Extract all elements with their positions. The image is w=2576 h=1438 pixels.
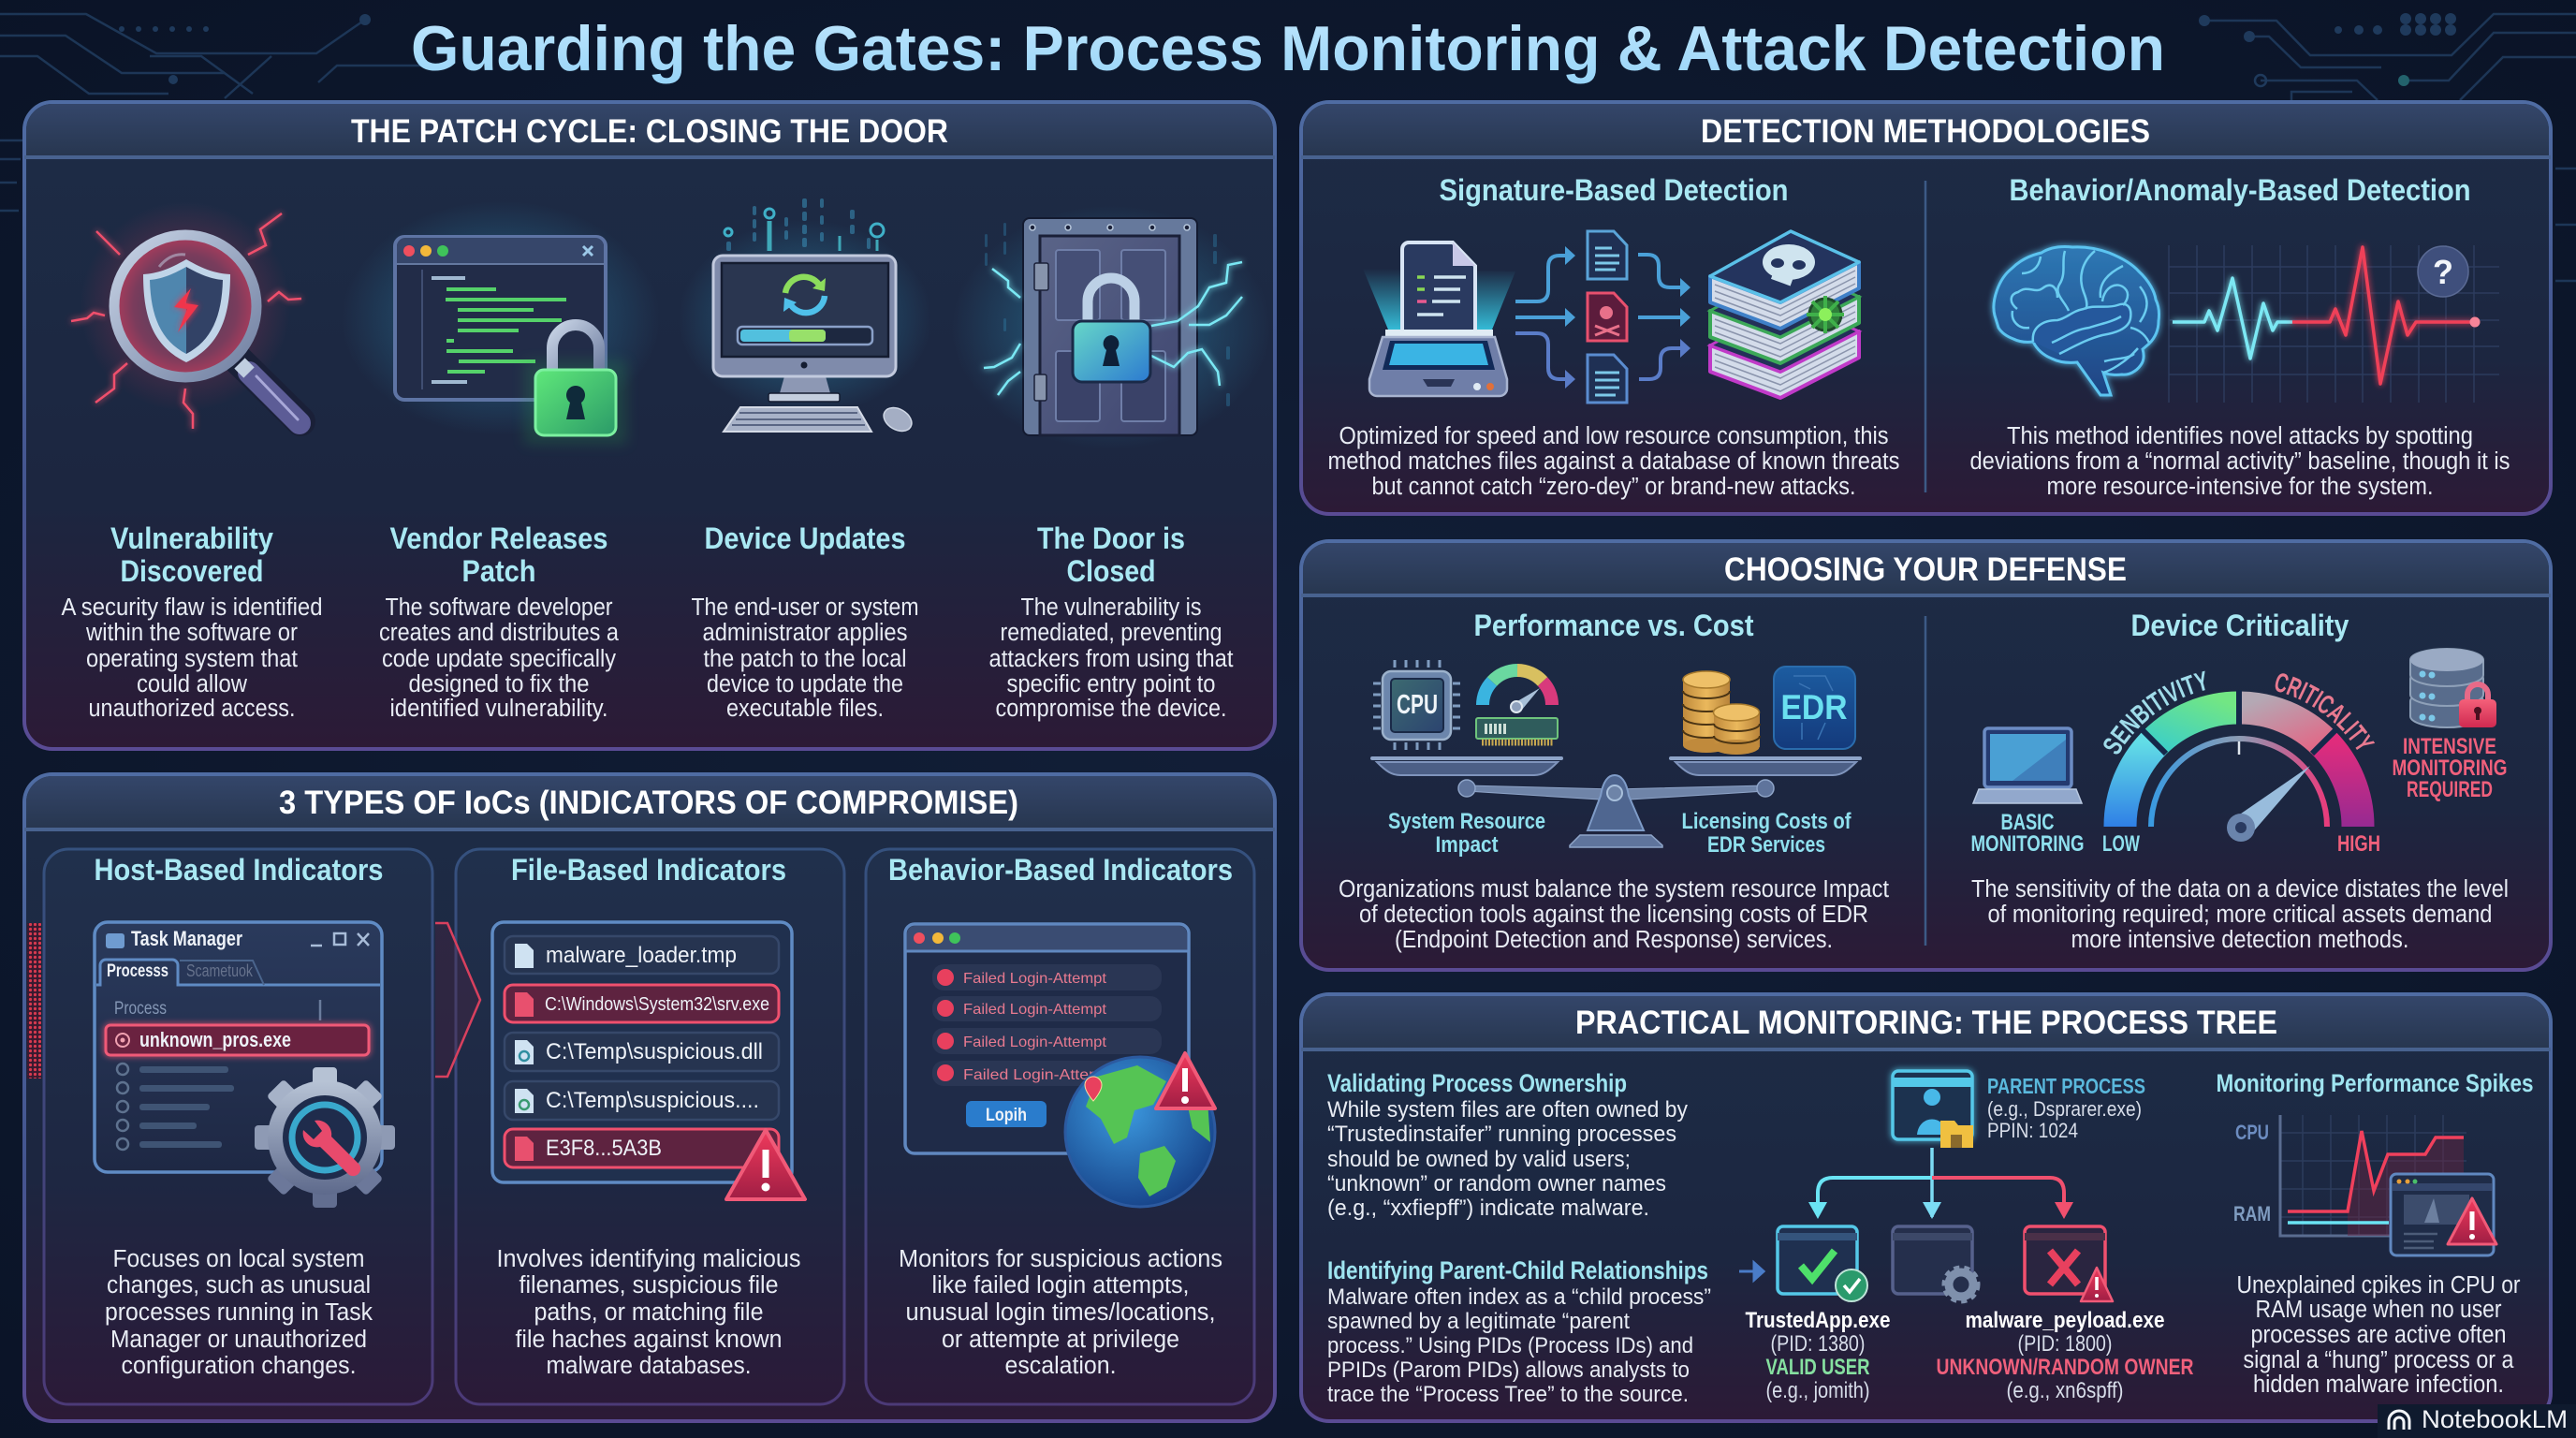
label: system resource impact: Impact [1436, 832, 1499, 858]
label: intensive monitoring required: REQUIRED [2407, 777, 2493, 802]
icon: login window with globe: Failed Login-Atter [963, 1067, 1095, 1083]
icon: login window with globe: Failed Login-Attempt [963, 1034, 1107, 1050]
icon: suspicious file list: C:\Windows\System32\srv.exe [545, 994, 769, 1015]
panel: detection methodologies [1301, 102, 2551, 514]
text: file-based description: malware databases. [547, 1353, 751, 1379]
heading: signature-based: Signature-Based Detection [1440, 173, 1788, 207]
heading: performance vs cost: Performance vs. Cost [1473, 609, 1754, 642]
label: basic monitoring [1971, 810, 2084, 857]
text: validating process ownership: “unknown” or random owner names [1327, 1171, 1666, 1196]
icon: balance scale with CPU, gauge, coins and EDR: EDR [1780, 688, 1848, 726]
column: vendor releases patch: The software developer [386, 594, 613, 621]
text: performance description: of detection tools against the licensing costs of EDR [1359, 902, 1868, 928]
icon: valid child window [1778, 1226, 1867, 1301]
text: device criticality description: more intensive detection methods. [2071, 927, 2409, 953]
chart: sensitivity gauge: HIGH [2337, 831, 2380, 857]
chart: CPU and RAM spikes: CPU [2235, 1121, 2269, 1144]
text: identifying parent-child relationships: PPIDs (Parom PIDs) allows analysts to [1327, 1357, 1690, 1383]
chart: sensitivity gauge [2102, 670, 2380, 857]
title: Guarding the Gates: Process Monitoring & Attack Detection [411, 13, 2165, 84]
text: identifying parent-child relationships: Identifying Parent-Child Relationships [1327, 1256, 1708, 1284]
text: host-based description: configuration changes. [122, 1353, 356, 1379]
text: file-based description: filenames, suspicious file [519, 1272, 779, 1299]
text: host-based description [105, 1246, 373, 1379]
chart: CPU and RAM spikes [2233, 1115, 2496, 1255]
icon: malware child window [2025, 1226, 2113, 1301]
column: vendor releases patch: Vendor Releases [389, 521, 608, 555]
text: validating process ownership: Validating Process Ownership [1327, 1069, 1627, 1097]
column: device updates: device to update the [707, 671, 903, 697]
text: behavior-based description [899, 1246, 1222, 1379]
icon: login window with globe: Lopih [986, 1106, 1027, 1125]
label: trusted app: (PID: 1380) [1771, 1331, 1865, 1357]
text: file-based description: paths, or matching file [534, 1299, 764, 1326]
column: the door is closed [988, 521, 1234, 722]
column: the door is closed: Closed [1067, 554, 1155, 588]
icon: locked door with lightning [952, 206, 1270, 449]
icon: monitor updating [679, 198, 931, 436]
label: licensing costs [1681, 809, 1852, 858]
label: licensing costs: EDR Services [1707, 832, 1825, 858]
text: identifying parent-child relationships: process.” Using PIDs (Process IDs) and [1327, 1333, 1693, 1358]
panel: choosing your defense [1299, 539, 2553, 972]
icon: task manager window with gear: Task Manager [131, 927, 242, 950]
text: device criticality description: The sensitivity of the data on a device distates the level [1971, 876, 2509, 902]
heading: IoCs: 3 TYPES OF IoCs (INDICATORS OF COMPROMISE) [279, 785, 1018, 821]
icon: task manager window with gear: Process [114, 999, 167, 1019]
text: file-based description [496, 1246, 801, 1379]
column: vulnerability discovered: could allow [137, 671, 248, 697]
text: spikes description: hidden malware infection. [2253, 1372, 2504, 1398]
heading: file-based: File-Based Indicators [511, 853, 786, 887]
text: validating process ownership: should be owned by valid users; [1327, 1147, 1631, 1172]
label: trusted app: VALID USER [1765, 1355, 1870, 1380]
text: performance description: (Endpoint Detection and Response) services. [1395, 927, 1833, 953]
column: vendor releases patch: designed to fix the [408, 671, 590, 697]
label: parent process: PARENT PROCESS [1987, 1074, 2145, 1098]
column: the door is closed: The vulnerability is [1020, 594, 1202, 621]
text: host-based description: Manager or unauthorized [110, 1327, 367, 1353]
label: intensive monitoring required [2393, 734, 2507, 802]
text: identifying parent-child relationships: trace the “Process Tree” to the source. [1327, 1382, 1689, 1407]
text: spikes description: RAM usage when no user [2256, 1297, 2502, 1323]
column: the door is closed: specific entry point to [1007, 671, 1215, 697]
column: vulnerability discovered [62, 521, 322, 722]
icon: login window with globe: Failed Login-Attempt [963, 1002, 1107, 1018]
icon: task manager window with gear: Processs [107, 961, 168, 981]
column: vulnerability discovered: Discovered [120, 554, 264, 588]
text: file-based description: Involves identifying malicious [496, 1246, 801, 1272]
text: behavior-based description: escalation. [1005, 1353, 1116, 1379]
label: malware payload: (PID: 1800) [2018, 1331, 2112, 1357]
icon: login window with globe [905, 924, 1215, 1207]
text: validating process ownership: While system files are often owned by [1327, 1097, 1689, 1123]
text: validating process ownership: (e.g., “xxfiepff”) indicate malware. [1327, 1196, 1649, 1221]
card: host-based indicators [27, 849, 432, 1404]
label: trusted app [1745, 1308, 1891, 1403]
label: basic monitoring: MONITORING [1971, 831, 2084, 857]
text: behavior-based description [1969, 423, 2510, 500]
column: vulnerability discovered: within the software or [85, 620, 298, 646]
label: trusted app: TrustedApp.exe [1745, 1308, 1891, 1333]
card: behavior-based indicators [866, 849, 1254, 1404]
icon: suspicious file list: malware_loader.tmp [546, 943, 737, 968]
text: validating process ownership [1327, 1069, 1689, 1221]
icon: suspicious file list: E3F8...5A3B [546, 1136, 662, 1161]
watermark: NotebookLM: NotebookLM [2422, 1405, 2568, 1433]
label: malware payload: UNKNOWN/RANDOM OWNER [1936, 1355, 2194, 1380]
icon: task manager window with gear [27, 922, 395, 1208]
column: device updates: the patch to the local [704, 646, 906, 672]
text: signature-based description: method matches files against a database of known threats [1327, 448, 1900, 475]
text: signature-based description [1327, 423, 1900, 500]
column: device updates: The end-user or system [691, 594, 919, 621]
icon: brain and anomaly ECG: ? [2433, 253, 2453, 291]
column: the door is closed: The Door is [1037, 521, 1185, 555]
label: intensive monitoring required: INTENSIVE [2403, 734, 2496, 759]
text: performance description [1339, 876, 1889, 953]
column: vulnerability discovered: operating system that [86, 646, 298, 672]
heading: choosing your defense: CHOOSING YOUR DEFENSE [1724, 551, 2127, 588]
chart: sensitivity gauge: CRITICALITY [2275, 673, 2376, 750]
chart: CPU and RAM spikes: RAM [2233, 1202, 2271, 1225]
icon: balance scale with CPU, gauge, coins and EDR [1370, 660, 1862, 847]
label: system resource impact: System Resource [1388, 809, 1545, 834]
label: parent process: PPIN: 1024 [1987, 1119, 2078, 1142]
heading: patch cycle: THE PATCH CYCLE: CLOSING THE DOOR [351, 113, 948, 150]
heading: practical monitoring: PRACTICAL MONITORING: THE PROCESS TREE [1575, 1005, 2277, 1041]
icon: suspicious file list: C:\Temp\suspicious.dll [546, 1039, 763, 1064]
text: device criticality description: of monitoring required; more critical assets demand [1988, 902, 2492, 928]
icon: code window with green lock [342, 201, 660, 445]
icon: brain and anomaly ECG [1994, 245, 2499, 403]
column: device updates: Device Updates [704, 521, 906, 555]
panel: the patch cycle [24, 102, 1275, 749]
column: the door is closed: compromise the device. [996, 696, 1226, 722]
column: the door is closed: attackers from using that [988, 646, 1234, 672]
icon: scanner, files and malware database [1363, 231, 1859, 403]
panel: practical monitoring [1301, 994, 2551, 1421]
text: identifying parent-child relationships [1327, 1256, 1711, 1407]
text: file-based description: file haches against known [515, 1327, 783, 1353]
label: trusted app: (e.g., jomith) [1765, 1378, 1870, 1403]
text: behavior-based description: Monitors for suspicious actions [899, 1246, 1222, 1272]
text: spikes description [2237, 1272, 2521, 1398]
label: intensive monitoring required: MONITORING [2393, 756, 2507, 781]
icon: suspicious file list [435, 922, 805, 1199]
icon: laptop [1973, 728, 2082, 803]
text: validating process ownership: “Trustedinstaifer” running processes [1327, 1122, 1676, 1147]
text: signature-based description: but cannot catch “zero-dey” or brand-new attacks. [1372, 474, 1855, 500]
text: behavior-based description: or attempte at privilege [942, 1327, 1179, 1353]
text: host-based description: processes running in Task [105, 1299, 373, 1326]
label: basic monitoring: BASIC [2001, 810, 2054, 835]
text: signature-based description: Optimized for speed and low resource consumption, this [1339, 423, 1889, 449]
text: host-based description: Focuses on local system [112, 1246, 365, 1272]
text: behavior-based description: more resource-intensive for the system. [2046, 474, 2434, 500]
column: the door is closed: remediated, preventing [1000, 620, 1222, 646]
chart: process tree [1745, 1071, 2194, 1403]
column: vulnerability discovered: unauthorized access. [88, 696, 296, 722]
card: file-based indicators [435, 849, 844, 1404]
column: vulnerability discovered: Vulnerability [110, 521, 273, 555]
column: device updates [691, 521, 919, 722]
text: behavior-based description: deviations from a “normal activity” baseline, though it is [1969, 448, 2510, 475]
column: device updates: administrator applies [702, 620, 908, 646]
icon: magnifier over cracked shield [71, 201, 301, 429]
heading: device criticality: Device Criticality [2130, 609, 2349, 642]
heading: host-based: Host-Based Indicators [94, 853, 384, 887]
icon: neutral child window [1893, 1226, 1978, 1301]
text: behavior-based description: This method identifies novel attacks by spotting [2007, 423, 2473, 449]
column: vendor releases patch [379, 521, 620, 722]
text: device criticality description [1971, 876, 2509, 953]
text: spikes description: processes are active often [2250, 1322, 2507, 1348]
text: behavior-based description: like failed login attempts, [932, 1272, 1189, 1299]
label: parent process: (e.g., Dsprarer.exe) [1987, 1097, 2142, 1121]
label: system resource impact [1388, 809, 1545, 858]
label: licensing costs: Licensing Costs of [1681, 809, 1852, 834]
arrow: to process tree [1739, 1263, 1764, 1280]
text: host-based description: changes, such as unusual [107, 1272, 371, 1299]
label: malware payload: (e.g., xn6spff) [2007, 1378, 2123, 1403]
text: behavior-based description: unusual login times/locations, [906, 1299, 1215, 1326]
icon: suspicious file list: C:\Temp\suspicious.... [546, 1088, 759, 1113]
icon: database with lock [2410, 649, 2496, 727]
heading: behavior-based: Behavior-Based Indicators [888, 853, 1233, 887]
watermark: NotebookLM [2378, 1404, 2576, 1438]
column: vendor releases patch: identified vulnerability. [389, 696, 608, 722]
heading: behavior-based detection: Behavior/Anomaly-Based Detection [2009, 173, 2471, 207]
text: performance description: Organizations must balance the system resource Impact [1339, 876, 1889, 902]
column: vulnerability discovered: A security flaw is identified [62, 594, 322, 621]
icon: task manager window with gear: unknown_pros.exe [139, 1028, 291, 1051]
column: vendor releases patch: creates and distributes a [379, 620, 620, 646]
panel: 3 types of IoCs [24, 774, 1275, 1421]
icon: parent process window [1893, 1071, 1973, 1148]
text: spikes description: signal a “hung” process or a [2243, 1347, 2514, 1373]
column: vendor releases patch: Patch [462, 554, 535, 588]
label: parent process [1987, 1074, 2145, 1142]
chart: sensitivity gauge: LOW [2102, 831, 2140, 857]
heading: detection methodologies: DETECTION METHODOLOGIES [1701, 113, 2150, 150]
icon: login window with globe: Failed Login-Attempt [963, 971, 1107, 987]
text: identifying parent-child relationships: Malware often index as a “child process” [1327, 1284, 1711, 1310]
label: malware payload: malware_peyload.exe [1966, 1308, 2164, 1333]
chart: sensitivity gauge: SENBITIVITY [2103, 670, 2205, 755]
icon: task manager window with gear: Scametuok [186, 961, 254, 980]
text: identifying parent-child relationships: spawned by a legitimate “parent [1327, 1309, 1630, 1334]
label: malware payload [1936, 1308, 2194, 1403]
column: device updates: executable files. [726, 696, 884, 722]
text: spikes description: Unexplained cpikes in CPU or [2237, 1272, 2521, 1299]
column: vendor releases patch: code update specifically [382, 646, 616, 672]
icon: balance scale with CPU, gauge, coins and EDR: CPU [1397, 690, 1438, 720]
